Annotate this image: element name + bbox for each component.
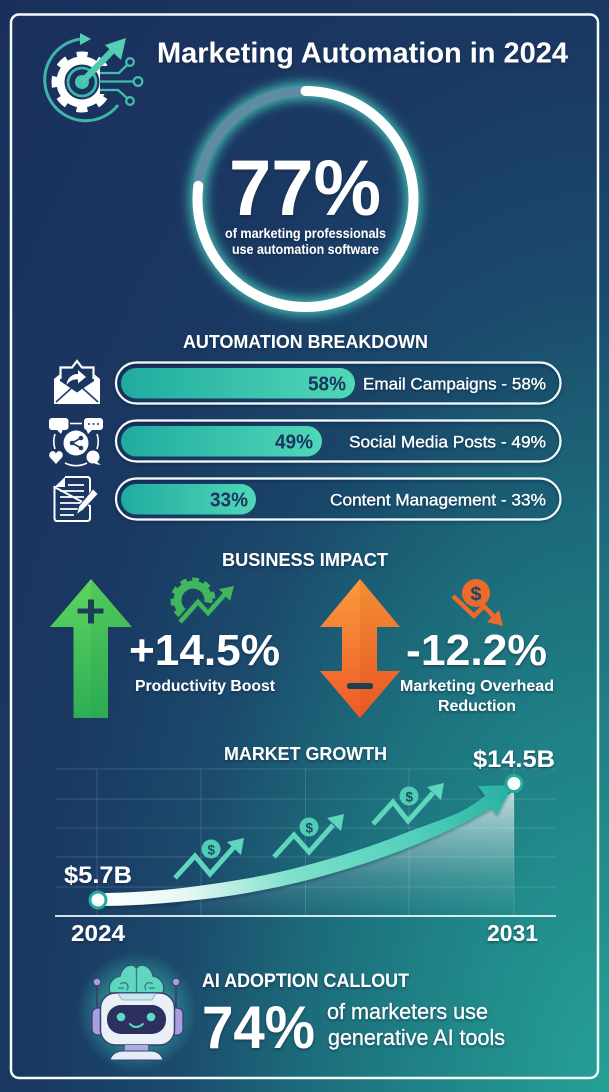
axis label: 2031: 2031 — [487, 920, 538, 946]
big stat: 77%: 77% — [229, 143, 381, 232]
icon: document and pencil — [54, 477, 98, 521]
mini arrow 2 — [274, 814, 344, 857]
start point — [90, 892, 106, 908]
value label: $14.5B: $14.5B — [473, 746, 555, 773]
icon: email envelope — [54, 361, 100, 404]
heading: business impact: BUSINESS IMPACT — [222, 550, 388, 570]
stat: overhead reduction: -12.2% — [406, 626, 547, 675]
end point — [506, 776, 522, 792]
mini arrow 3: $ — [406, 790, 414, 804]
mini arrow 2: $ — [306, 820, 314, 836]
bar: social media posts — [116, 420, 560, 462]
bar: social media posts: 49% — [275, 432, 313, 454]
icon: automation gear logo — [45, 33, 142, 121]
axis label: 2024: 2024 — [71, 920, 125, 946]
stat caption: of marketing professionals — [225, 225, 386, 241]
mini arrow 3 — [373, 783, 444, 824]
icon: orange double arrow — [320, 579, 400, 718]
bar: email campaigns: Email Campaigns - 58% — [363, 374, 546, 394]
bar: content management: Content Management - 33% — [330, 490, 546, 510]
bar: content management — [116, 478, 560, 520]
callout text — [327, 999, 505, 1050]
stat: productivity: +14.5% — [129, 626, 280, 675]
title: Marketing Automation in 2024 — [157, 38, 568, 70]
heading: automation breakdown: AUTOMATION BREAKDOWN — [183, 332, 428, 352]
icon: social media — [49, 418, 103, 466]
heading: market growth: MARKET GROWTH — [224, 744, 387, 764]
line chart: market growth — [55, 776, 556, 916]
bar: social media posts: Social Media Posts - 49% — [349, 432, 546, 452]
bar: email campaigns — [116, 362, 560, 404]
icon: cost down chart — [453, 579, 503, 626]
icon: robot with brain — [77, 952, 197, 1072]
stat: overhead reduction — [400, 626, 554, 715]
icon: cost down chart: $ — [470, 584, 482, 605]
callout text: generative AI tools — [328, 1025, 505, 1050]
stat: overhead reduction: Marketing Overhead — [400, 678, 554, 695]
mini arrow 1 — [175, 838, 244, 878]
callout text: of marketers use — [327, 999, 488, 1024]
stat caption — [225, 225, 386, 257]
donut chart: 77% — [198, 91, 414, 307]
icon: green up arrow — [50, 579, 132, 718]
big stat: 74%: 74% — [202, 994, 315, 1061]
stat caption: use automation software — [232, 241, 379, 257]
bar: email campaigns: 58% — [308, 374, 346, 396]
bar: content management: 33% — [210, 490, 248, 512]
stat: productivity: Productivity Boost — [135, 678, 276, 695]
icon: productivity gear chart — [173, 580, 234, 622]
heading: AI adoption callout: AI ADOPTION CALLOUT — [202, 970, 409, 992]
value label: $5.7B: $5.7B — [64, 862, 132, 889]
stat: overhead reduction: Reduction — [438, 698, 516, 715]
mini arrow 1: $ — [208, 842, 216, 858]
